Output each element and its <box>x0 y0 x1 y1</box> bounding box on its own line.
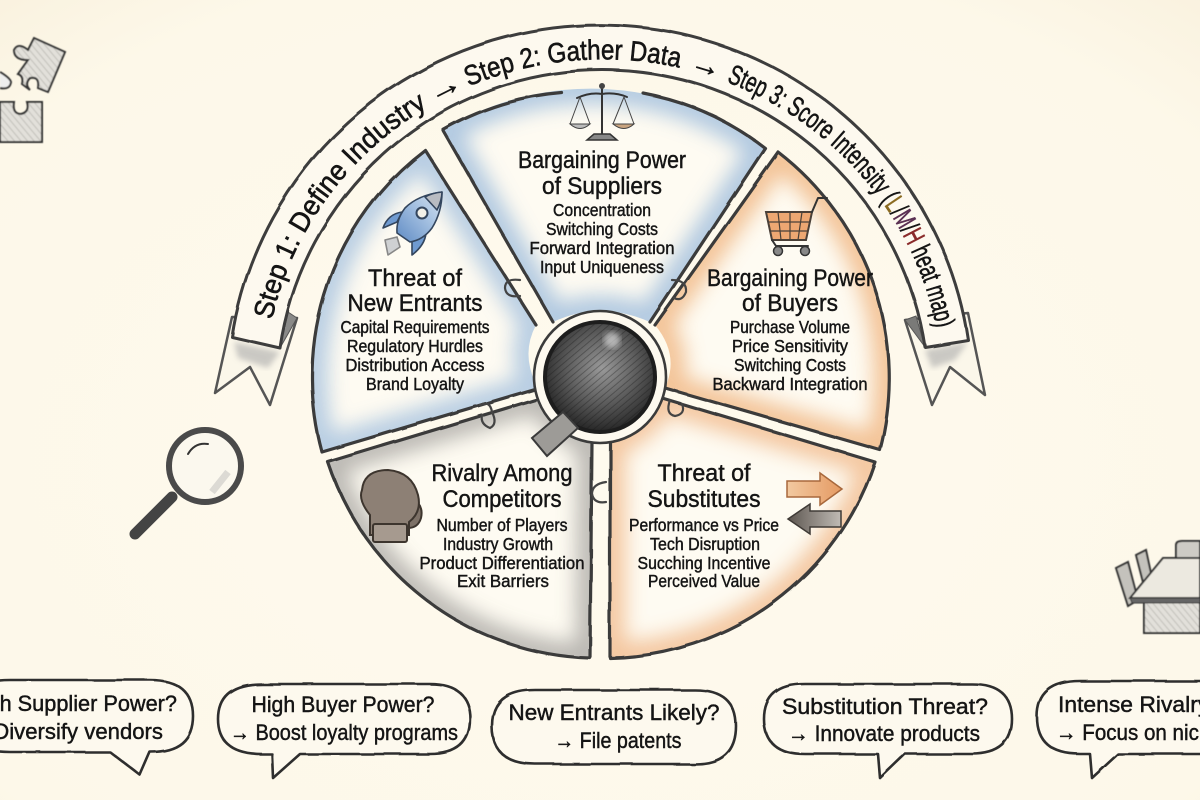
five forces wheel <box>312 83 889 658</box>
step text: heat map) <box>911 243 956 327</box>
panel: bargaining power of suppliers: of Suppliers <box>542 173 662 200</box>
callouts row <box>0 680 1200 778</box>
puzzle connectors <box>480 280 686 502</box>
list: supplier factors: Switching Costs <box>546 219 658 239</box>
heading: substitutes: Threat of <box>658 460 751 487</box>
central hub <box>532 311 666 456</box>
ribbon arc <box>232 25 968 348</box>
list: entrant factors: Brand Loyalty <box>366 374 464 394</box>
heading: new entrants: Threat of <box>368 265 462 292</box>
list: entrant factors: Regulatory Hurdles <box>347 336 483 356</box>
list: entrant factors: Distribution Access <box>346 355 485 375</box>
list: substitute factors <box>629 515 779 591</box>
callout: buyer power <box>218 684 470 778</box>
callout: rivalry <box>1037 681 1200 778</box>
list: buyer factors: Backward Integration <box>712 374 868 394</box>
panel: rivalry among competitors <box>328 398 592 658</box>
callout: buyer power: → Boost loyalty programs <box>230 720 458 745</box>
list: rivalry factors: Industry Growth <box>443 534 553 554</box>
ribbon left tail <box>215 312 297 405</box>
ribbon right tail <box>905 313 985 405</box>
ribbon banner with steps <box>214 24 986 406</box>
heading: buyers: Bargaining Power <box>707 265 873 292</box>
list: buyer factors: Switching Costs <box>734 355 846 375</box>
panel: threat of new entrants: New Entrants <box>348 290 482 317</box>
step text: → <box>437 86 456 98</box>
step text <box>254 39 956 327</box>
callout: substitution threat <box>764 684 1012 778</box>
list: rivalry factors: Number of Players <box>436 515 568 535</box>
panel: threat of new entrants <box>312 150 538 452</box>
list: rivalry factors <box>420 515 584 591</box>
callout: supplier power <box>0 680 193 775</box>
list: substitute factors: Tech Disruption <box>650 534 760 554</box>
step text: (L/M/H <box>878 192 926 246</box>
icon: substitution arrows <box>787 473 842 534</box>
heading: rivalry: Rivalry Among <box>432 460 572 487</box>
panel: threat of substitutes <box>610 398 875 658</box>
step text: Step 2: Gather Data <box>464 39 680 85</box>
list: buyer factors <box>712 317 868 394</box>
icon: meeting table <box>1116 541 1200 633</box>
list: entrant factors <box>340 317 490 394</box>
panel: bargaining power of suppliers <box>443 83 765 322</box>
panel: rivalry among competitors: Competitors <box>442 486 562 513</box>
callout: substitution threat: Substitution Threat? <box>782 694 988 719</box>
step text: → <box>696 66 714 74</box>
list: supplier factors: Input Uniqueness <box>540 257 664 277</box>
list: supplier factors: Forward Integration <box>530 238 674 258</box>
callout: new entrants: New Entrants Likely? <box>508 700 720 725</box>
step text: Step 3: Score Intensity <box>728 65 890 194</box>
list: supplier factors: Concentration <box>553 200 651 220</box>
callout: new entrants <box>492 690 736 764</box>
icon: magnifying glass <box>135 430 241 534</box>
icon: balance scales <box>570 83 634 140</box>
callout: substitution threat: → Innovate products <box>788 721 980 746</box>
step text: Step 1: Define Industry <box>254 94 424 318</box>
callout: new entrants: → File patents <box>554 728 682 753</box>
callout: buyer power: High Buyer Power? <box>252 692 434 717</box>
list: rivalry factors: Exit Barriers <box>457 571 549 591</box>
icon: puzzle pieces <box>0 38 65 142</box>
list: buyer factors: Purchase Volume <box>730 317 850 337</box>
panel: threat of substitutes: Substitutes <box>648 486 760 513</box>
heading: suppliers: Bargaining Power <box>518 147 686 174</box>
panel: bargaining power of buyers: of Buyers <box>742 290 838 317</box>
list: entrant factors: Capital Requirements <box>340 317 490 337</box>
list: substitute factors: Performance vs Price <box>629 515 779 535</box>
list: supplier factors <box>530 200 674 277</box>
icon: rocket <box>383 192 442 255</box>
list: rivalry factors: Product Differentiation <box>420 553 584 573</box>
icon: shopping cart <box>766 198 827 256</box>
list: substitute factors: Perceived Value <box>648 571 760 591</box>
panel: bargaining power of buyers <box>655 152 889 450</box>
list: buyer factors: Price Sensitivity <box>732 336 848 356</box>
icon: boxing glove <box>361 470 422 542</box>
list: substitute factors: Sucching Incentive <box>638 553 770 573</box>
hub handle <box>532 412 578 456</box>
